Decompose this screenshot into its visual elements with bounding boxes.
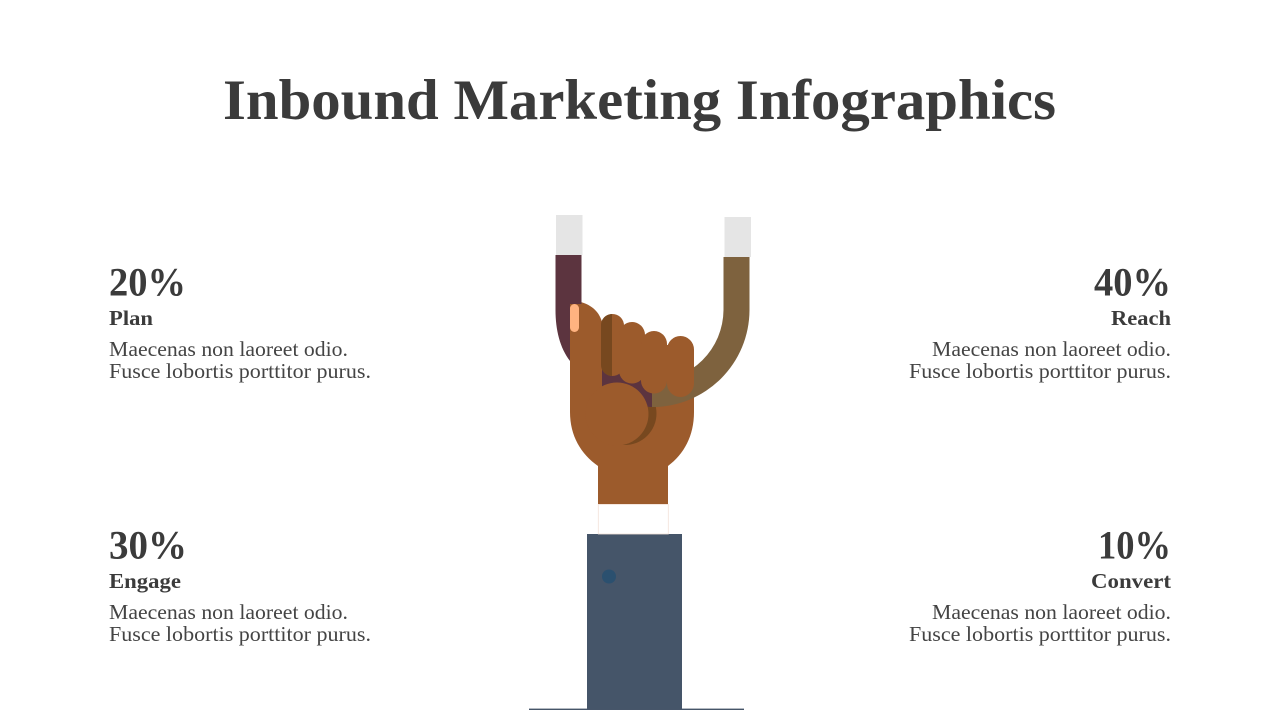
title: Inbound Marketing Infographics	[223, 69, 1056, 132]
thumb nail	[570, 304, 579, 332]
thumb base crease	[594, 382, 656, 445]
sleeve button	[602, 570, 616, 584]
stat: 10%: 10%	[1098, 522, 1171, 568]
panel: reach	[909, 260, 1171, 383]
hand palm and thumb	[570, 301, 694, 504]
text block: reach description: Maecenas non laoreet odio.	[932, 337, 1171, 361]
text block: reach description	[909, 337, 1171, 383]
text block: reach description: Fusce lobortis porttitor purus.	[909, 359, 1171, 383]
text block: convert description: Maecenas non laoreet odio.	[932, 600, 1171, 624]
sleeve	[587, 534, 682, 709]
text block: plan description	[109, 337, 371, 383]
stat: 20%: 20%	[109, 260, 186, 304]
stat: 40%: 40%	[1094, 260, 1171, 304]
text block: engage description	[109, 600, 371, 646]
magnet left arm	[556, 215, 652, 407]
text block: convert description: Fusce lobortis porttitor purus.	[909, 622, 1171, 646]
text block: plan description: Fusce lobortis porttitor purus.	[109, 359, 371, 383]
heading: plan: Plan	[109, 306, 153, 330]
panel: engage	[109, 522, 371, 646]
text block: engage description: Fusce lobortis porttitor purus.	[109, 622, 371, 646]
fingers	[601, 314, 694, 397]
ground line	[529, 709, 744, 710]
text block: plan description: Maecenas non laoreet odio.	[109, 337, 348, 361]
panel: plan	[109, 260, 371, 383]
heading: engage: Engage	[109, 569, 181, 593]
panel: convert	[909, 522, 1172, 646]
text block: convert description	[909, 600, 1171, 646]
heading: convert: Convert	[1091, 569, 1172, 593]
magnet right arm	[652, 217, 751, 407]
thumb base	[586, 382, 648, 446]
illustration: hand holding magnet	[529, 215, 751, 710]
stat: 30%: 30%	[109, 522, 187, 568]
text block: engage description: Maecenas non laoreet odio.	[109, 600, 348, 624]
shirt cuff	[598, 504, 668, 534]
heading: reach: Reach	[1111, 306, 1171, 330]
